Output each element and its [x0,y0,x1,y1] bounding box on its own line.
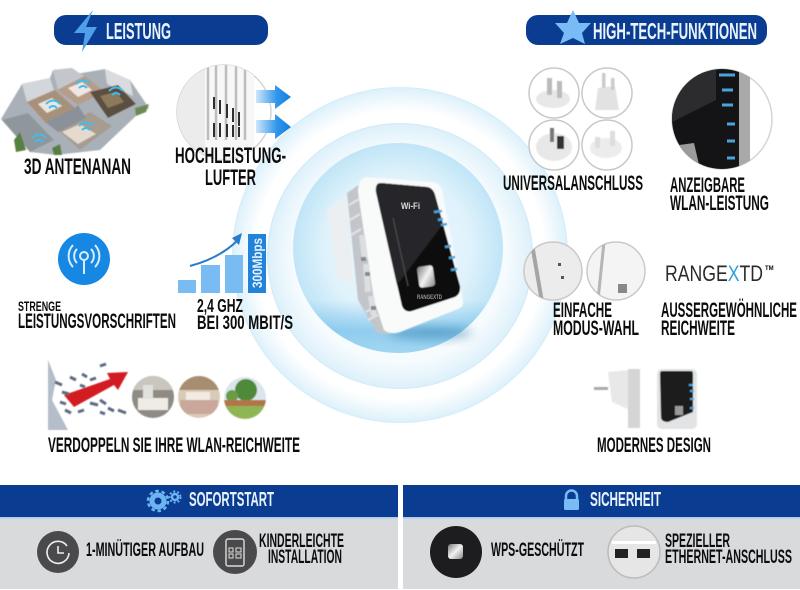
image: bathroom [132,376,174,418]
feature: Verdoppeln Sie Ihre WLAN-Reichweite: VERDOPPELN SIE IHRE WLAN-REICHWEITE [48,434,300,457]
icon: antenna [58,233,110,285]
panel: Sofortstart: SOFORTSTART [189,489,274,511]
feature: 2,4 GHz bei 300 Mbit/s [178,233,293,334]
feature: Modernes Design: MODERNES DESIGN [597,434,711,457]
image: bedroom [178,376,220,418]
feature: Universalanschluss [503,68,643,195]
icon: ethernet ports [608,526,660,578]
heading: Leistung: LEISTUNG [106,18,171,44]
feature: 2,4 GHz bei 300 Mbit/s: 300Mbps [249,238,265,288]
panel: Sofortstart: 1-MINÜTIGER AUFBAU [86,540,204,561]
panel: Sicherheit: SICHERHEIT [590,489,661,511]
icon: airflow arrows [256,85,291,139]
panel: Sicherheit: SPEZIELLER [665,531,730,552]
vent stripes [208,64,245,140]
icon: LED panel close-up [672,69,772,169]
feature: 2,4 GHz bei 300 Mbit/s: 2,4 GHZ [197,296,243,316]
feature: 3D Antennen floor plan [1,68,149,179]
bar chart [178,280,196,293]
feature: 3D Antennen floor plan: 3D ANTENANAN [24,154,131,179]
feature: Strenge Leistungsvorschriften: STRENGE [18,299,61,314]
feature: Hochleistungs-Lufter: HOCHLEISTUNG- [175,143,286,168]
central product: WiFi repeater: RANGEXTD [417,295,442,301]
icon: wifi marks [32,80,123,142]
feature: Strenge Leistungsvorschriften: LEISTUNGSVORSCHRIFTEN [18,310,176,333]
heading: High-Tech-Funktionen [526,10,767,45]
icon: gears [148,491,180,511]
heading: Leistung [54,10,268,52]
logo: RangeXTD: TM [765,266,774,272]
logo: RangeXTD: RANGEXTD [665,261,763,286]
image: repeater side view [594,369,640,428]
icon: WPS button [430,526,482,578]
feature: Hochleistungs-Lufter: LUFTER [205,165,256,190]
icon: one-minute clock [37,531,79,573]
icon: padlock [566,491,577,500]
icon: lightning bolt [74,10,97,52]
plug housing [327,195,353,283]
image: broken wall with red arrow [48,360,68,430]
feature: 2,4 GHz bei 300 Mbit/s: BEI 300 MBIT/S [197,313,293,334]
panel: Sofortstart: KINDERLEICHTE [259,531,344,552]
icon: plug adapters [529,68,632,170]
feature: Einfache Modus-Wahl: MODUS-WAHL [553,317,639,340]
arrow [190,240,238,266]
feature: Verdoppeln Sie Ihre WLAN-Reichweite [48,360,300,457]
feature: Hochleistungs-Lufter [175,64,291,190]
feature: Aussergewöhnliche Reichweite: REICHWEITE [661,317,735,340]
background signal rings [232,87,568,423]
panel: Sofortstart [0,485,398,589]
feature: Anzeigbare WLAN-Leistung [670,69,772,215]
central product: WiFi repeater: Wi-Fi [401,201,420,211]
panel: Sicherheit: WPS-GESCHÜTZT [491,540,584,561]
image: repeater front view [657,369,697,429]
feature: Einfache Modus-Wahl: EINFACHE [553,299,612,322]
icon: mode switch close-ups [524,242,582,300]
icon: star [555,10,591,44]
icon: installation checklist [213,530,257,574]
feature: Modernes Design [594,369,711,457]
image: garden [224,377,266,419]
feature: Aussergewöhnliche Reichweite [661,261,797,340]
panel: Sicherheit [403,485,800,589]
central product: WiFi repeater [327,177,472,339]
feature: Universalanschluss: UNIVERSALANSCHLUSS [503,172,643,195]
feature: Strenge Leistungsvorschriften [18,233,176,333]
feature: Einfache Modus-Wahl [524,242,645,340]
panel: Sofortstart: INSTALLATION [268,547,342,568]
